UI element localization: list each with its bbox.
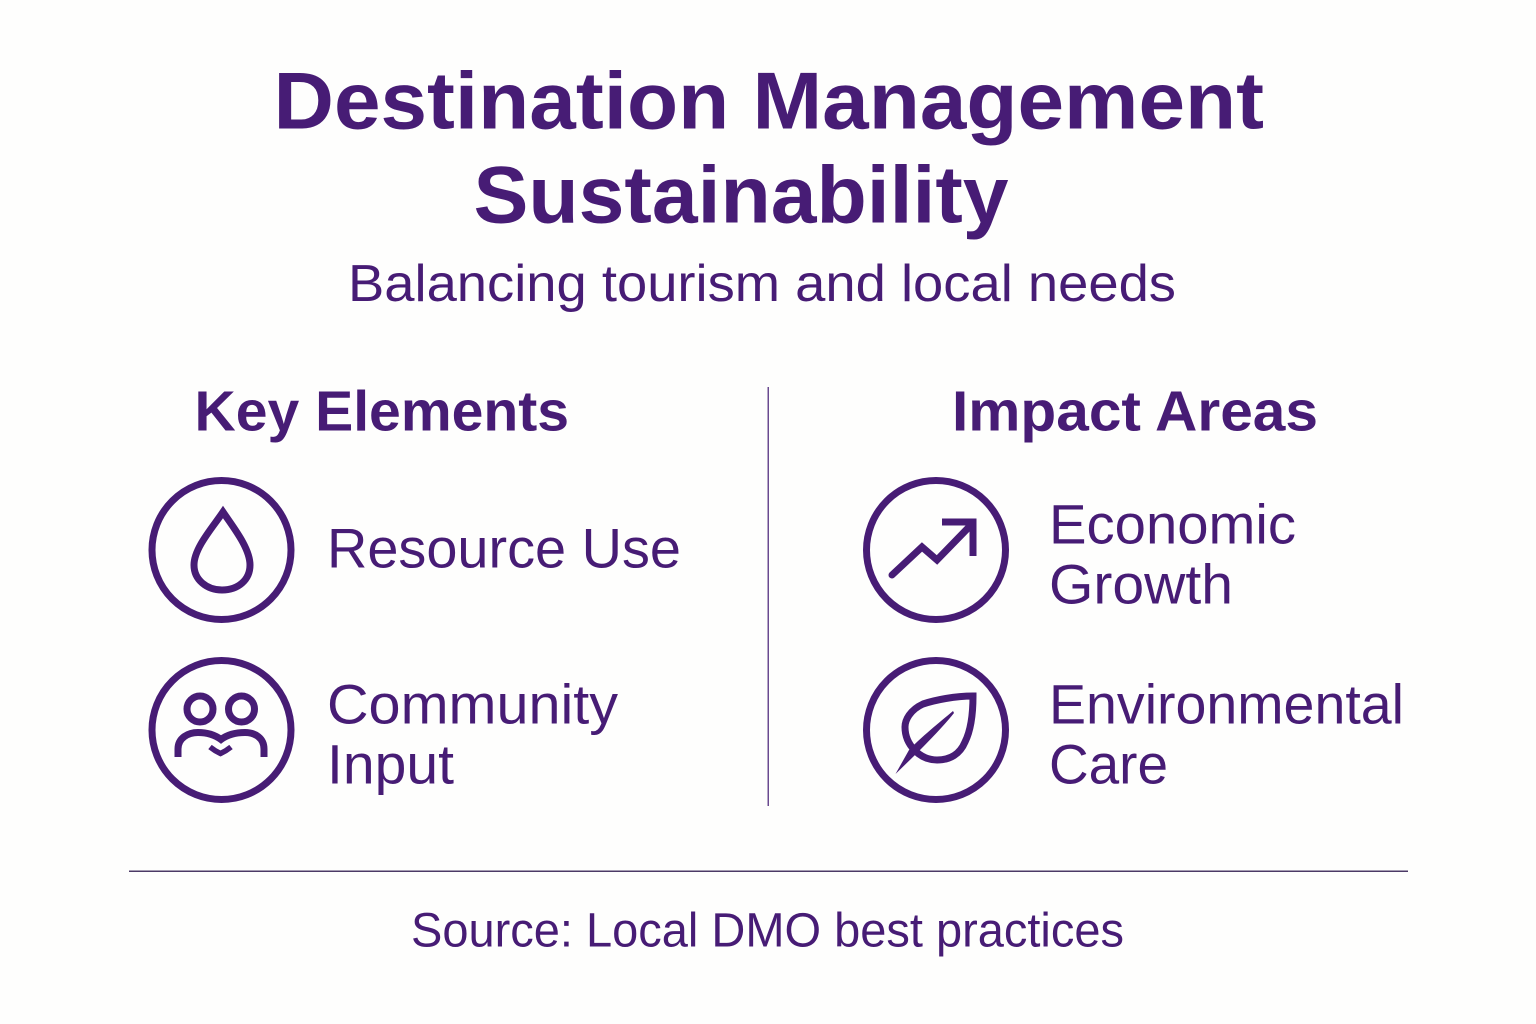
label: environmental care: Environmental — [1049, 672, 1404, 736]
subtitle: Balancing tourism and local needs — [348, 255, 1176, 313]
source note: Source: Local DMO best practices — [411, 904, 1124, 958]
panel: key elements — [152, 380, 681, 800]
label: community input: Input — [327, 732, 454, 796]
label: community input: Community — [327, 672, 618, 736]
label: economic growth: Economic — [1049, 492, 1296, 556]
icon: water drop — [152, 480, 291, 620]
label: environmental care: Care — [1049, 732, 1168, 796]
heading: impact areas: Impact Areas — [952, 380, 1318, 444]
label: economic growth: Growth — [1049, 552, 1233, 616]
icon: growth chart — [866, 480, 1006, 620]
label: economic growth — [1049, 492, 1296, 616]
label: resource use: Resource Use — [327, 516, 681, 580]
title: Destination Management — [274, 56, 1264, 146]
icon: community — [152, 660, 291, 800]
icon: leaf — [866, 660, 1006, 800]
divider: horizontal — [129, 870, 1408, 872]
label: community input — [327, 672, 618, 796]
label: environmental care — [1049, 672, 1404, 796]
title — [274, 56, 1264, 240]
divider: vertical — [768, 387, 769, 806]
heading: key elements: Key Elements — [194, 380, 569, 444]
panel: impact areas — [866, 380, 1404, 800]
title: Sustainability — [474, 150, 1008, 240]
